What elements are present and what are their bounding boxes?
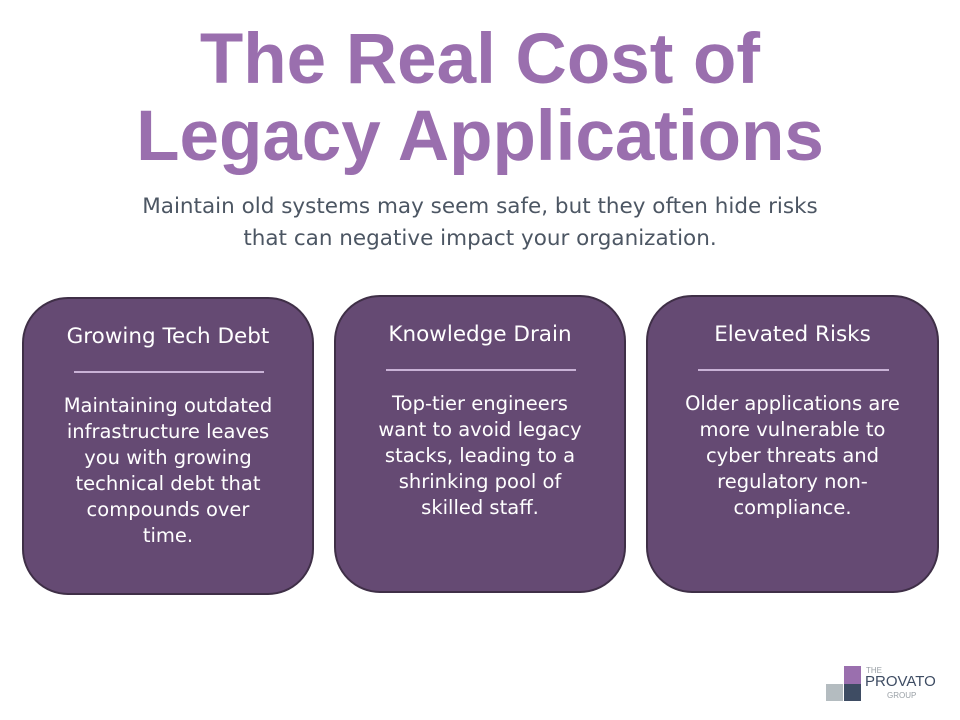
panel: knowledge drain <box>334 295 626 593</box>
heading: Knowledge Drain <box>388 322 572 347</box>
body text: Older applications are more vulnerable to cyber threats and regulatory non-compliance. <box>685 392 900 519</box>
logo: the provato group: GROUP <box>887 691 916 700</box>
logo: the provato group <box>826 666 936 701</box>
title: Legacy Applications <box>136 97 824 176</box>
title: The Real Cost of <box>200 20 760 99</box>
body text: Top-tier engineers want to avoid legacy stacks, leading to a shrinking pool of skilled staff. <box>378 392 582 519</box>
panel: elevated risks <box>646 295 939 593</box>
panel: growing tech debt <box>22 297 314 595</box>
subtitle: Maintain old systems may seem safe, but they often hide risks <box>142 194 818 219</box>
heading: Elevated Risks <box>714 322 871 347</box>
heading: Growing Tech Debt <box>67 324 269 349</box>
logo: the provato group: PROVATO <box>865 673 936 690</box>
title <box>136 20 824 176</box>
subtitle <box>142 194 818 251</box>
logo: the provato group: THE <box>866 666 882 675</box>
subtitle: that can negative impact your organization. <box>243 226 717 251</box>
body text: Maintaining outdated infrastructure leaves you with growing technical debt that compounds over time. <box>64 394 272 547</box>
